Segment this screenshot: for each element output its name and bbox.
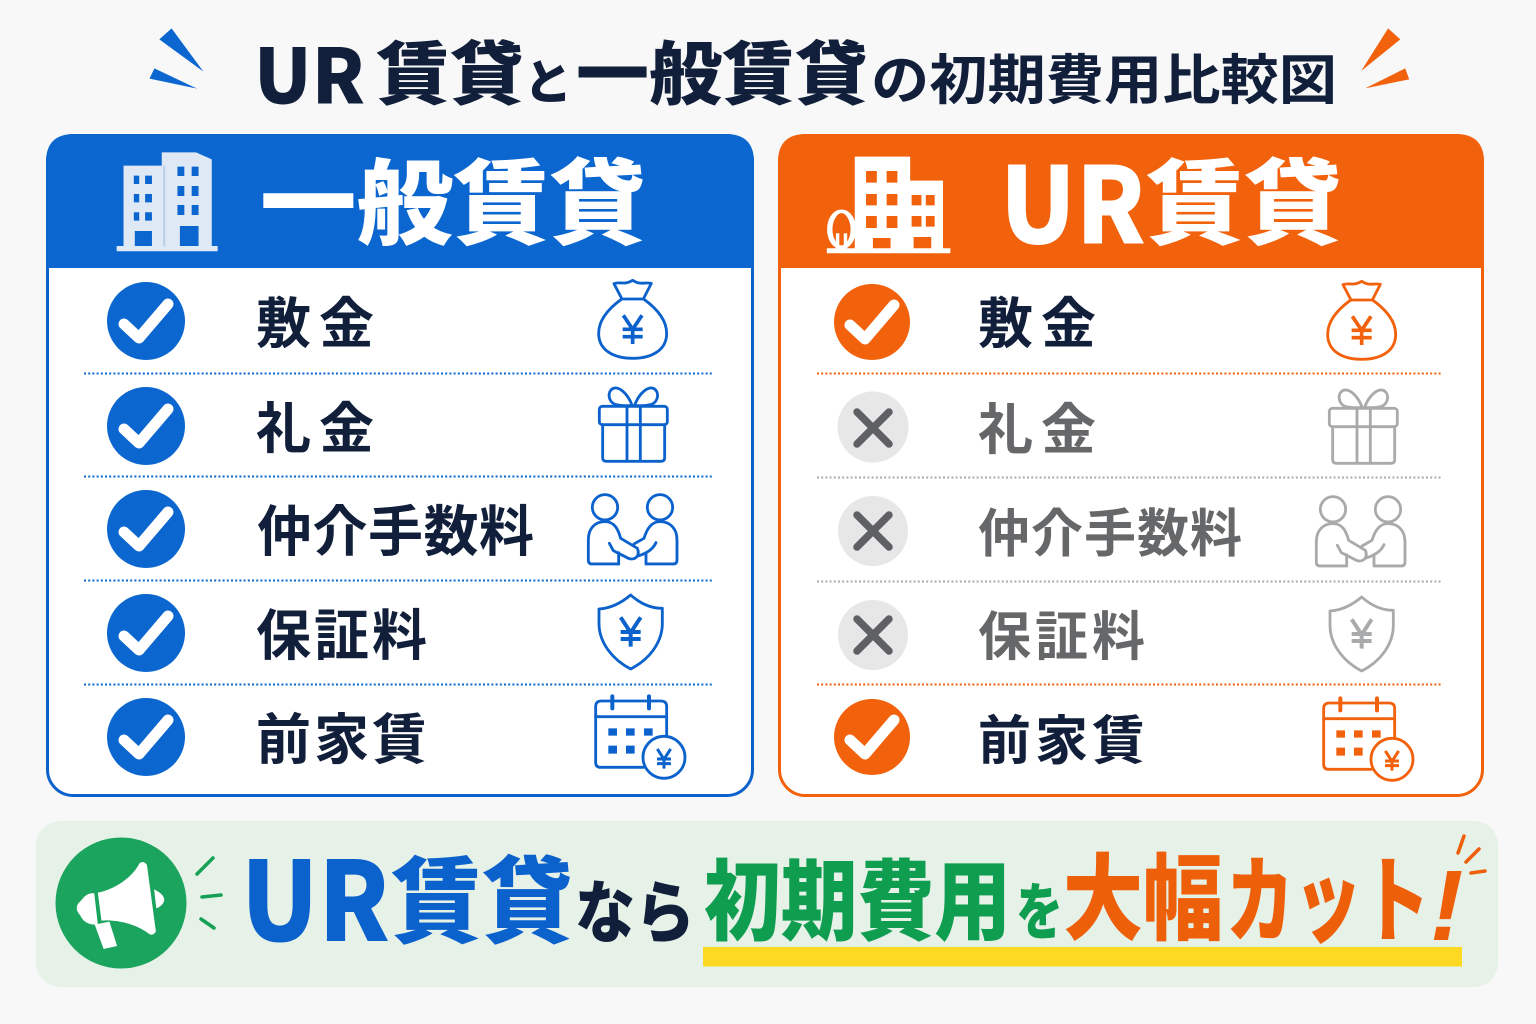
header title: 一般賃貸: 一般賃貸	[260, 129, 646, 264]
panel header: UR rental	[778, 120, 1484, 274]
callout text: UR	[241, 813, 390, 973]
row: 前家賃: 前家賃	[256, 695, 427, 775]
row: 礼金 not required: 礼金	[978, 385, 1096, 465]
row: 前家賃 included: 前家賃	[978, 699, 1145, 775]
row: 仲介手数料	[107, 487, 677, 568]
row: 敷金	[107, 279, 667, 360]
row: 保証料 not required	[838, 595, 1393, 671]
row: 礼金	[107, 384, 667, 465]
header title: UR賃貸: UR	[1000, 120, 1146, 274]
row: 前家賃	[107, 695, 685, 778]
callout banner	[36, 813, 1498, 987]
callout text: 賃貸	[391, 827, 573, 963]
callout text: なら	[575, 858, 695, 957]
yellow underline	[703, 947, 1462, 966]
icon: apartment with tree	[827, 157, 950, 253]
row: 敷金: 敷金	[256, 279, 374, 359]
header title: UR賃貸	[1000, 120, 1342, 274]
row: 敷金 included	[834, 279, 1396, 360]
row: 前家賃 included	[834, 698, 1413, 780]
title	[254, 16, 1337, 126]
panel header: general rental	[46, 129, 754, 268]
orange sparkle marks	[1458, 836, 1485, 873]
callout text: !	[1430, 850, 1463, 962]
callout text: カット	[1226, 826, 1430, 962]
icon: megaphone	[56, 838, 221, 968]
title: の初期費用比較図	[871, 36, 1337, 115]
title: 賃貸	[376, 18, 524, 118]
icon: office building	[117, 152, 218, 251]
title: 一般賃貸	[576, 18, 868, 118]
title: と	[524, 43, 572, 113]
row: 保証料	[107, 591, 662, 672]
panel: general rental	[46, 129, 754, 796]
header title: UR賃貸: 賃貸	[1146, 129, 1342, 264]
callout text: 初期費用	[704, 832, 1011, 959]
callout text: を	[1016, 862, 1063, 952]
row: 保証料 not required: 保証料	[978, 595, 1145, 671]
icon: orange burst right of title	[1361, 28, 1409, 88]
row: 礼金 not required	[838, 385, 1397, 465]
callout text: 大幅	[1063, 824, 1223, 960]
row: 仲介手数料 not required: 仲介手数料	[978, 492, 1242, 567]
icon: blue burst left of title	[150, 28, 203, 89]
row: 敷金 included: 敷金	[978, 279, 1096, 359]
title: UR	[254, 16, 365, 126]
callout text	[241, 813, 1463, 973]
row: 仲介手数料 not required	[838, 492, 1405, 567]
row: 保証料: 保証料	[256, 591, 427, 671]
panel: UR rental	[778, 120, 1484, 796]
row: 礼金: 礼金	[256, 384, 374, 464]
row: 仲介手数料: 仲介手数料	[257, 487, 534, 567]
